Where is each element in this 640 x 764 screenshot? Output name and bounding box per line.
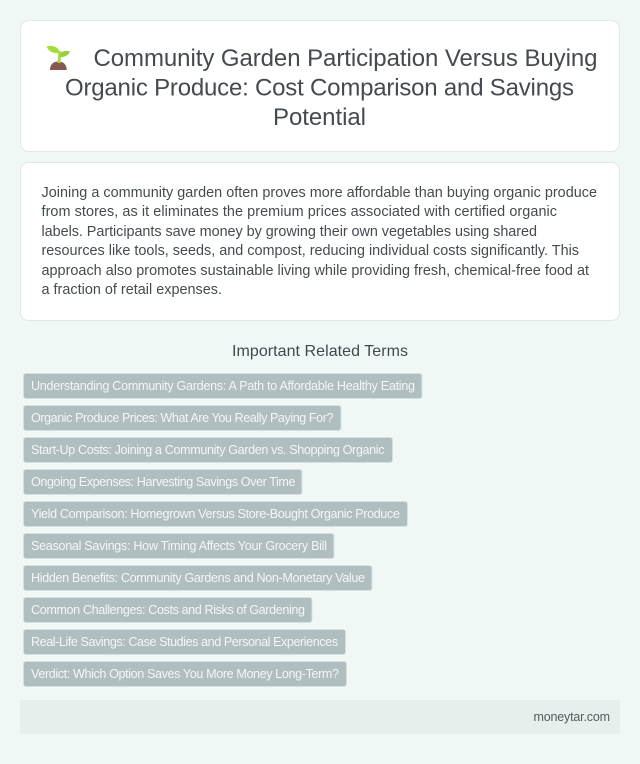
- tag 3: Start-Up Costs: Joining a Community Garden vs. Shopping Organic: [31, 443, 384, 457]
- tag 6: [24, 534, 334, 558]
- tag 7: Hidden Benefits: Community Gardens and Non-Monetary Value: [31, 571, 365, 585]
- text block: summary paragraph: labels. Participants save money by growing their own vegetables using shared: [42, 224, 537, 240]
- tag 4: [24, 470, 302, 494]
- title: Potential: [273, 104, 366, 131]
- title: [65, 45, 598, 131]
- tag 2: [24, 406, 341, 430]
- title: Organic Produce: Cost Comparison and Savings: [65, 74, 574, 102]
- tag 1: Understanding Community Gardens: A Path to Affordable Healthy Eating: [31, 379, 415, 393]
- tag 8: [24, 598, 312, 622]
- panel: summary card: [20, 162, 620, 320]
- tag 5: Yield Comparison: Homegrown Versus Store-Bought Organic Produce: [31, 507, 400, 521]
- text block: summary paragraph: approach also promotes sustainable living while providing fresh, chemical-free food at: [42, 263, 589, 279]
- tag 8: Common Challenges: Costs and Risks of Gardening: [31, 603, 305, 617]
- text block: summary paragraph: a fraction of retail expenses.: [42, 282, 222, 298]
- icon: seedling: [47, 46, 70, 70]
- tag 1: [24, 374, 422, 398]
- heading: related terms: Important Related Terms: [232, 343, 408, 360]
- footer: [20, 700, 620, 734]
- title: Community Garden Participation Versus Buying: [94, 45, 598, 72]
- text block: summary paragraph: from stores, as it eliminates the premium prices associated with certified organic: [42, 204, 557, 220]
- text block: summary paragraph: [42, 185, 597, 298]
- tag 7: [24, 566, 372, 590]
- tag 6: Seasonal Savings: How Timing Affects Your Grocery Bill: [31, 539, 327, 553]
- text block: summary paragraph: Joining a community garden often proves more affordable than buying organic produce: [42, 185, 597, 201]
- list: related term tags: [24, 374, 422, 686]
- tag 9: [24, 630, 346, 654]
- footer: moneytar.com: [534, 710, 610, 724]
- tag 10: [24, 662, 346, 686]
- tag 4: Ongoing Expenses: Harvesting Savings Over Time: [31, 475, 296, 489]
- tag 3: [24, 438, 392, 462]
- tag 10: Verdict: Which Option Saves You More Money Long-Term?: [31, 667, 339, 681]
- text block: summary paragraph: resources like tools, seeds, and compost, reducing individual costs significantly. This: [42, 243, 579, 259]
- panel: title card: [20, 20, 620, 152]
- tag 2: Organic Produce Prices: What Are You Really Paying For?: [31, 411, 334, 425]
- tag 9: Real-Life Savings: Case Studies and Personal Experiences: [31, 635, 338, 649]
- tag 5: [24, 502, 408, 526]
